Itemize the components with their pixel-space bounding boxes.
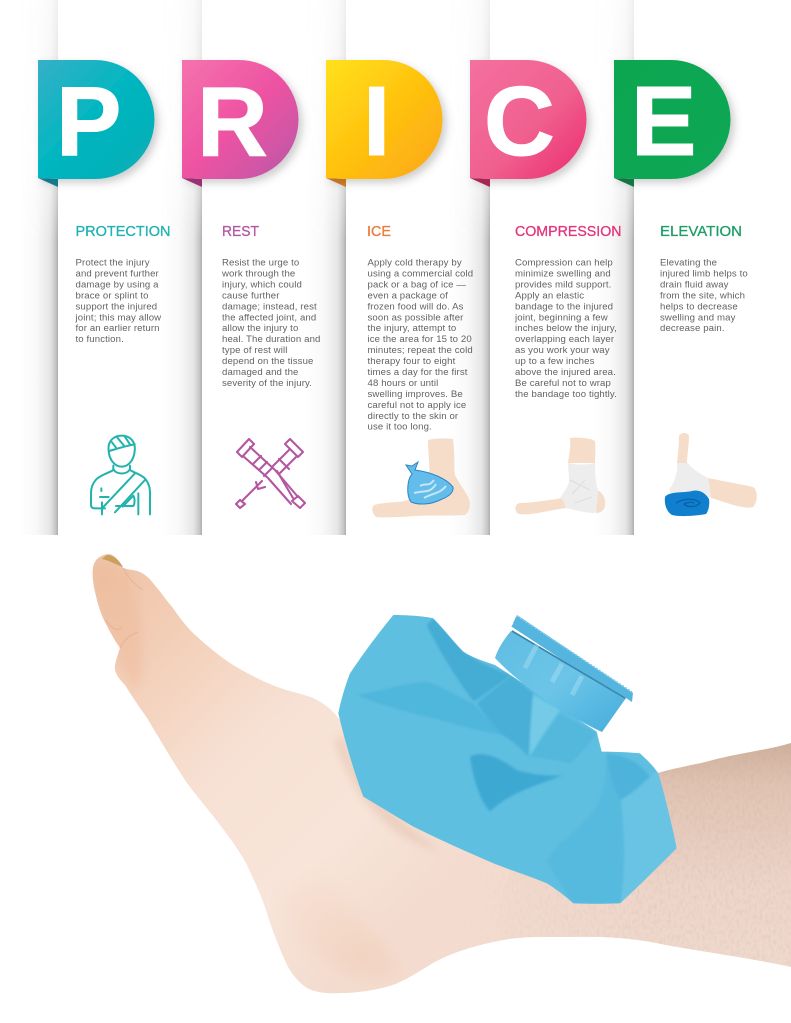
- photo: blue ice pack: [338, 615, 683, 904]
- background: column shadows: [18, 0, 634, 535]
- text: compression: Be careful not to wrap: [515, 378, 611, 389]
- text: ice: therapy four to eight: [368, 356, 456, 367]
- icon: foot with ice bag: [372, 438, 470, 517]
- text: ice: directly to the skin or: [368, 411, 459, 422]
- text: compression: minimize swelling and: [515, 268, 611, 279]
- text: rest: the affected joint, and: [222, 312, 316, 323]
- text: ice: times a day for the first: [368, 367, 468, 378]
- text: elevation: helps to decrease: [660, 301, 738, 312]
- text: ice: frozen food will do. As: [368, 301, 464, 312]
- text: protection: Protect the injury: [76, 258, 150, 268]
- text: compression: overlapping each layer: [515, 334, 615, 345]
- letter tab: C: C: [484, 66, 555, 176]
- text: compression: up to a few inches: [515, 356, 595, 367]
- text: protection: damage by using a: [76, 279, 159, 290]
- photo: bare foot and lower leg: [92, 554, 791, 994]
- icon: elevated foot on pillow: [665, 433, 757, 516]
- letter tab: I: I: [363, 66, 390, 176]
- heading: rest: REST: [222, 224, 259, 240]
- letter tab: R: [182, 60, 299, 187]
- text: compression: Apply an elastic: [515, 290, 584, 301]
- text: protection: for an earlier return: [76, 323, 160, 334]
- text: elevation: drain fluid away: [660, 279, 729, 290]
- text: rest: type of rest will: [222, 345, 288, 356]
- text: elevation: swelling and may: [660, 312, 736, 323]
- letter tab: C: [470, 60, 587, 187]
- text: compression: Compression can help: [515, 258, 613, 268]
- text: rest: cause further: [222, 290, 280, 301]
- text: compression: joint, beginning a few: [514, 312, 608, 323]
- letter tab: I: [326, 60, 442, 187]
- text: ice: Apply cold therapy by: [368, 258, 462, 268]
- text: rest: allow the injury to: [222, 323, 298, 334]
- icon: bandaged foot: [515, 438, 605, 514]
- text: elevation: injured limb helps to: [660, 268, 748, 279]
- letter tab: R: R: [197, 66, 268, 176]
- text: ice: use it too long.: [368, 422, 432, 433]
- heading: elevation: ELEVATION: [660, 224, 742, 240]
- text: protection: brace or splint to: [76, 290, 149, 301]
- text: protection: and prevent further: [76, 268, 160, 279]
- text: ice: swelling improves. Be: [368, 389, 463, 400]
- text: ice: ice the area for 15 to 20: [368, 334, 472, 345]
- text: compression: provides mild support.: [515, 279, 612, 290]
- text: elevation: Elevating the: [660, 258, 717, 268]
- text: rest: heal. The duration and: [222, 334, 320, 345]
- letter tab: P: [38, 60, 154, 187]
- text: ice: minutes; repeat the cold: [368, 345, 473, 356]
- heading: compression: COMPRESSION: [515, 224, 622, 240]
- letter tab: E: E: [631, 66, 696, 176]
- text: protection: to function.: [76, 334, 124, 345]
- photo: ice pack cap: [495, 615, 633, 732]
- text: compression: bandage to the injured: [515, 301, 613, 312]
- icon: crossed crutches: [236, 439, 305, 508]
- text: rest: damage; instead, rest: [222, 301, 317, 312]
- photo: foot with ice pack: [92, 554, 791, 994]
- text: protection: joint; this may allow: [74, 312, 161, 323]
- text: compression: the bandage too tightly.: [515, 389, 617, 400]
- text: ice: soon as possible after: [368, 312, 464, 323]
- text: rest: depend on the tissue: [222, 356, 313, 367]
- letter tab: P: P: [56, 66, 121, 176]
- text: rest: severity of the injury.: [222, 378, 312, 389]
- text: ice: pack or a bag of ice —: [368, 279, 466, 290]
- letter tab: E: [614, 60, 730, 187]
- text: rest: work through the: [221, 268, 295, 279]
- text: ice: the injury, attempt to: [368, 323, 456, 334]
- text: elevation: decrease pain.: [660, 323, 725, 334]
- text: protection: support the injured: [76, 301, 157, 312]
- text: ice: careful not to apply ice: [368, 400, 466, 411]
- text: elevation: from the site, which: [660, 290, 745, 301]
- text: compression: inches below the injury,: [515, 323, 617, 334]
- heading: ice: ICE: [367, 224, 391, 240]
- text: rest: injury, which could: [222, 279, 302, 290]
- icon: injured person with sling: [91, 436, 150, 514]
- text: compression: above the injured area.: [515, 367, 616, 378]
- text: compression: as you work your way: [515, 345, 610, 356]
- text: ice: even a package of: [368, 290, 448, 301]
- text: rest: Resist the urge to: [222, 258, 299, 268]
- text: ice: using a commercial cold: [368, 268, 473, 279]
- text: ice: 48 hours or until: [368, 378, 438, 389]
- heading: protection: PROTECTION: [76, 224, 170, 240]
- text: rest: damaged and the: [222, 367, 298, 378]
